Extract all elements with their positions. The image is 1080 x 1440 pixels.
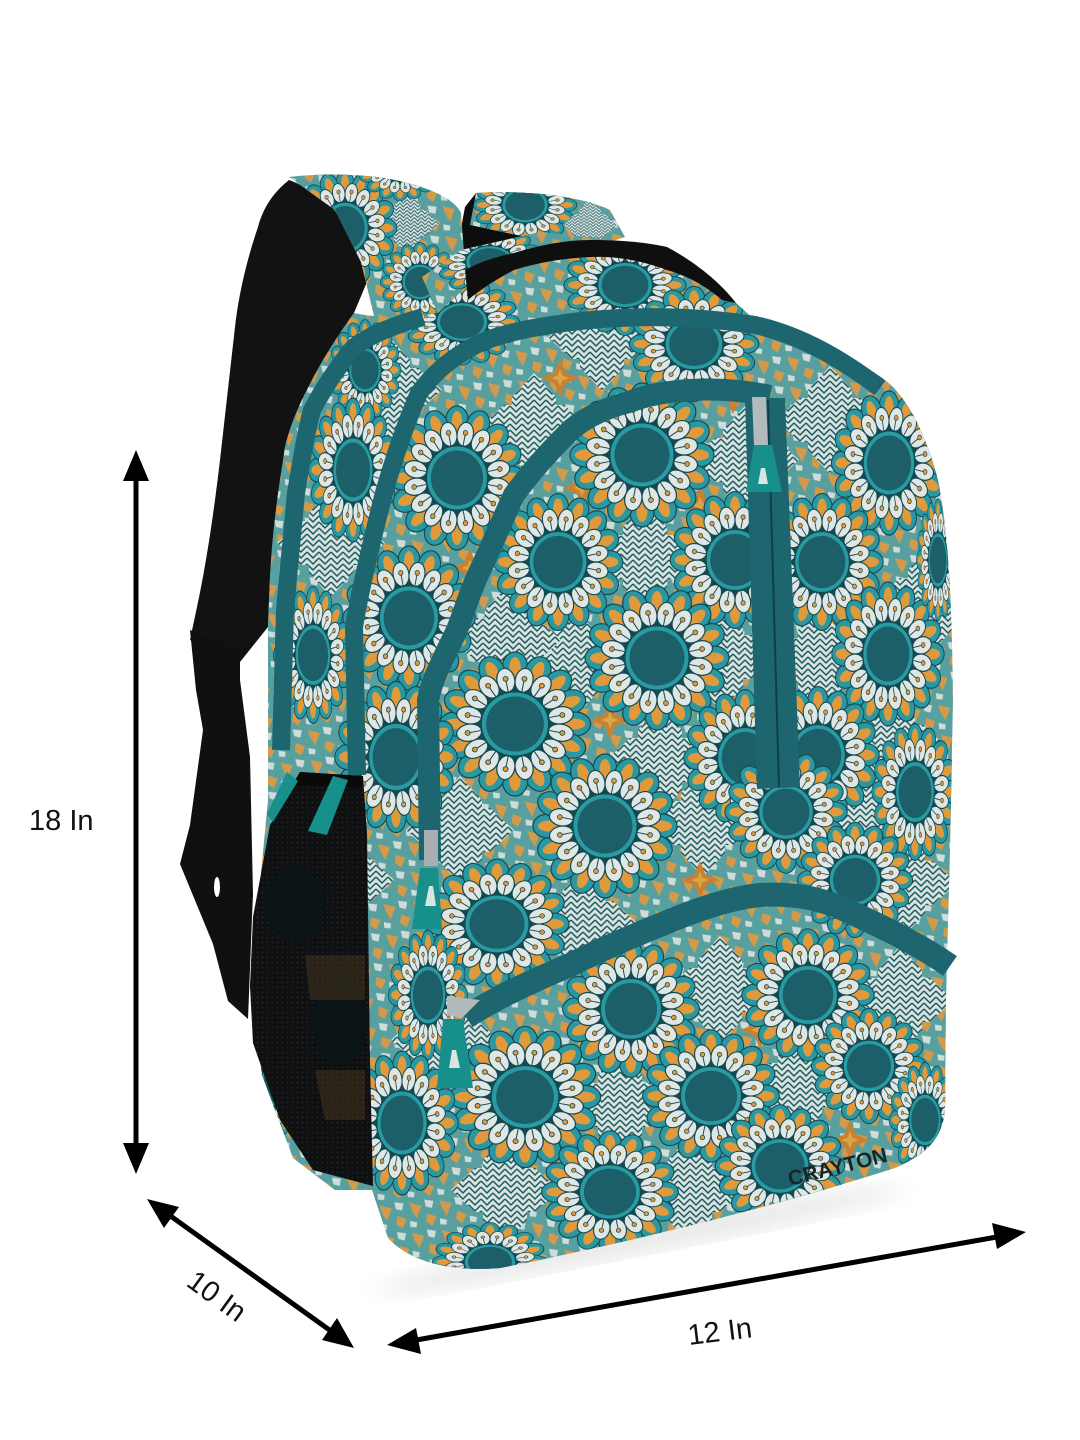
zip pullers (267, 397, 782, 1088)
label: width: 12 In (686, 1312, 754, 1352)
ground shadow (372, 1175, 908, 1305)
label: depth: 10 In (181, 1265, 252, 1329)
chevron crosses (277, 283, 984, 1244)
front vertical zip pocket (745, 398, 800, 789)
left shoulder strap padding (190, 180, 369, 662)
top carry handle (465, 240, 736, 303)
body with mandala print (245, 235, 984, 1302)
lower webbing strap (180, 630, 253, 1019)
brand logo: CRAYTON (786, 1144, 890, 1191)
left shoulder strap print (289, 174, 464, 317)
zip bands (281, 317, 950, 1017)
second shoulder strap (462, 192, 625, 250)
label: height: 18 In (29, 805, 94, 837)
arrow: height (123, 450, 149, 1174)
arrow: depth (147, 1199, 354, 1348)
handle loop print (422, 232, 600, 313)
backpack product (180, 129, 984, 1302)
arrow: width (387, 1223, 1026, 1354)
mesh side pocket (250, 772, 373, 1186)
